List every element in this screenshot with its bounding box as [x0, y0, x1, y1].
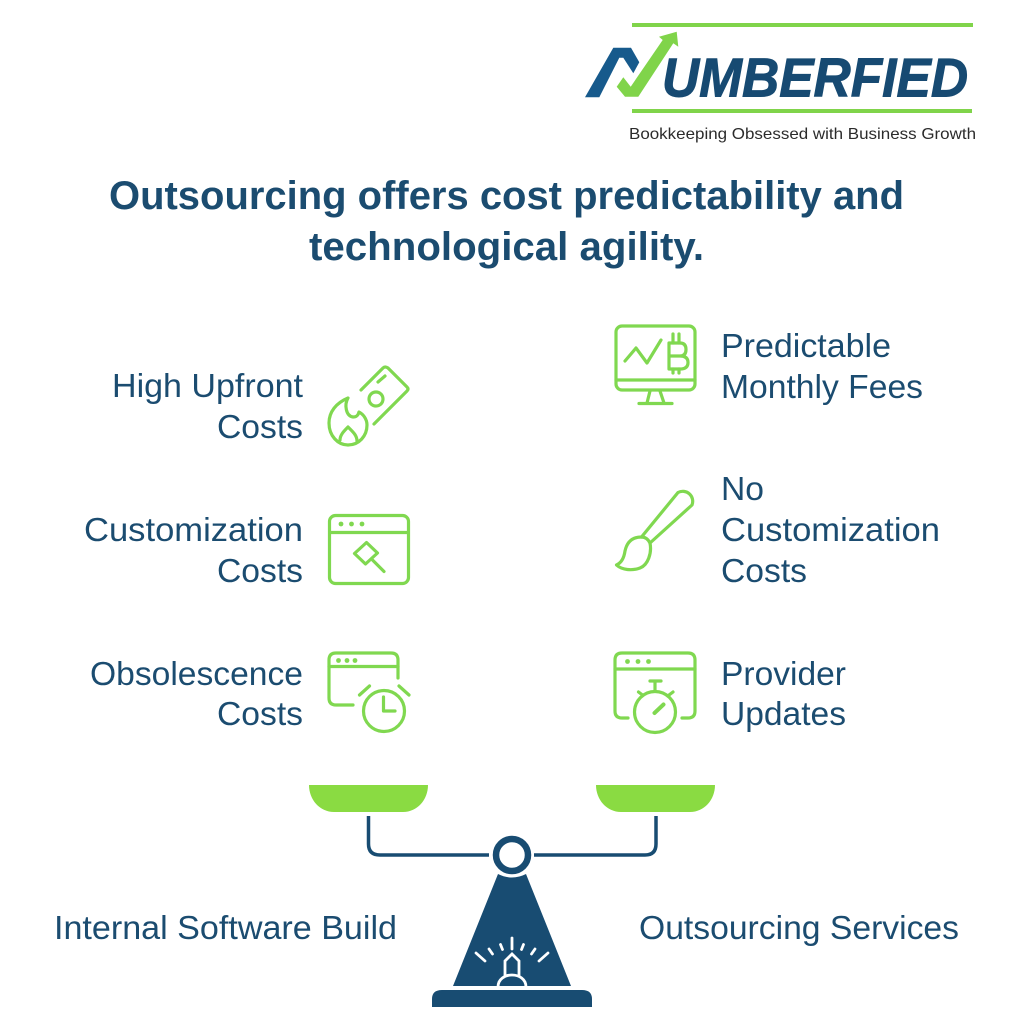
label: No Customization Costs: No: [721, 470, 764, 507]
label: Predictable Monthly Fees: Predictable: [721, 327, 891, 364]
label: Provider Updates: [721, 655, 846, 732]
icon: browser with stopwatch: [615, 653, 695, 732]
icon: browser with alarm clock: [329, 653, 409, 732]
left beam arm: [368, 816, 489, 855]
logo mark: green growth arrow: [617, 32, 678, 97]
label: Customization Costs (left): [84, 511, 303, 589]
right pan: [596, 785, 715, 812]
label: Outsourcing Services: Outsourcing Services: [639, 909, 959, 946]
label: Provider Updates: Updates: [721, 695, 846, 732]
stand light rays and bulb: [476, 938, 548, 987]
balance scale: [309, 785, 715, 1007]
title: technological agility.: [309, 225, 704, 269]
label: No Customization Costs: [721, 470, 940, 589]
label: High Upfront Costs: Costs: [217, 408, 303, 445]
logo mark: dark N stroke: [585, 48, 639, 97]
label: Predictable Monthly Fees: Monthly Fees: [721, 368, 923, 405]
label: Internal Software Build: Internal Software Build: [54, 909, 397, 946]
label: Predictable Monthly Fees: [721, 327, 923, 405]
label: Customization Costs (left): Costs: [217, 552, 303, 589]
label: Obsolescence Costs: Obsolescence: [90, 655, 303, 692]
label: Obsolescence Costs: Costs: [217, 695, 303, 732]
label: No Customization Costs: Customization: [721, 511, 940, 548]
pivot ring: [496, 839, 528, 871]
label: No Customization Costs: Costs: [721, 552, 807, 589]
scale stand triangle: [453, 874, 571, 986]
logo tagline: Bookkeeping Obsessed with Business Growth: [629, 126, 976, 143]
label: Provider Updates: Provider: [721, 655, 846, 692]
title: Outsourcing offers cost predictability and: [109, 174, 904, 218]
icon: browser with hammer: [330, 516, 408, 584]
right beam arm: [534, 816, 656, 855]
icon: paint brush: [616, 491, 693, 570]
label: Obsolescence Costs: [90, 655, 303, 732]
label: Customization Costs (left): Customization: [84, 511, 303, 548]
left pan: [309, 785, 428, 812]
label: High Upfront Costs: High Upfront: [112, 367, 303, 404]
title: [109, 174, 904, 269]
scale base: [432, 990, 592, 1007]
icon: burning money: [329, 367, 408, 445]
icon: monitor with chart and bitcoin: [616, 326, 695, 404]
logo: Numberfied: [585, 23, 976, 143]
label: High Upfront Costs: [112, 367, 303, 445]
logo wordmark: UMBERFIED: [662, 46, 968, 108]
